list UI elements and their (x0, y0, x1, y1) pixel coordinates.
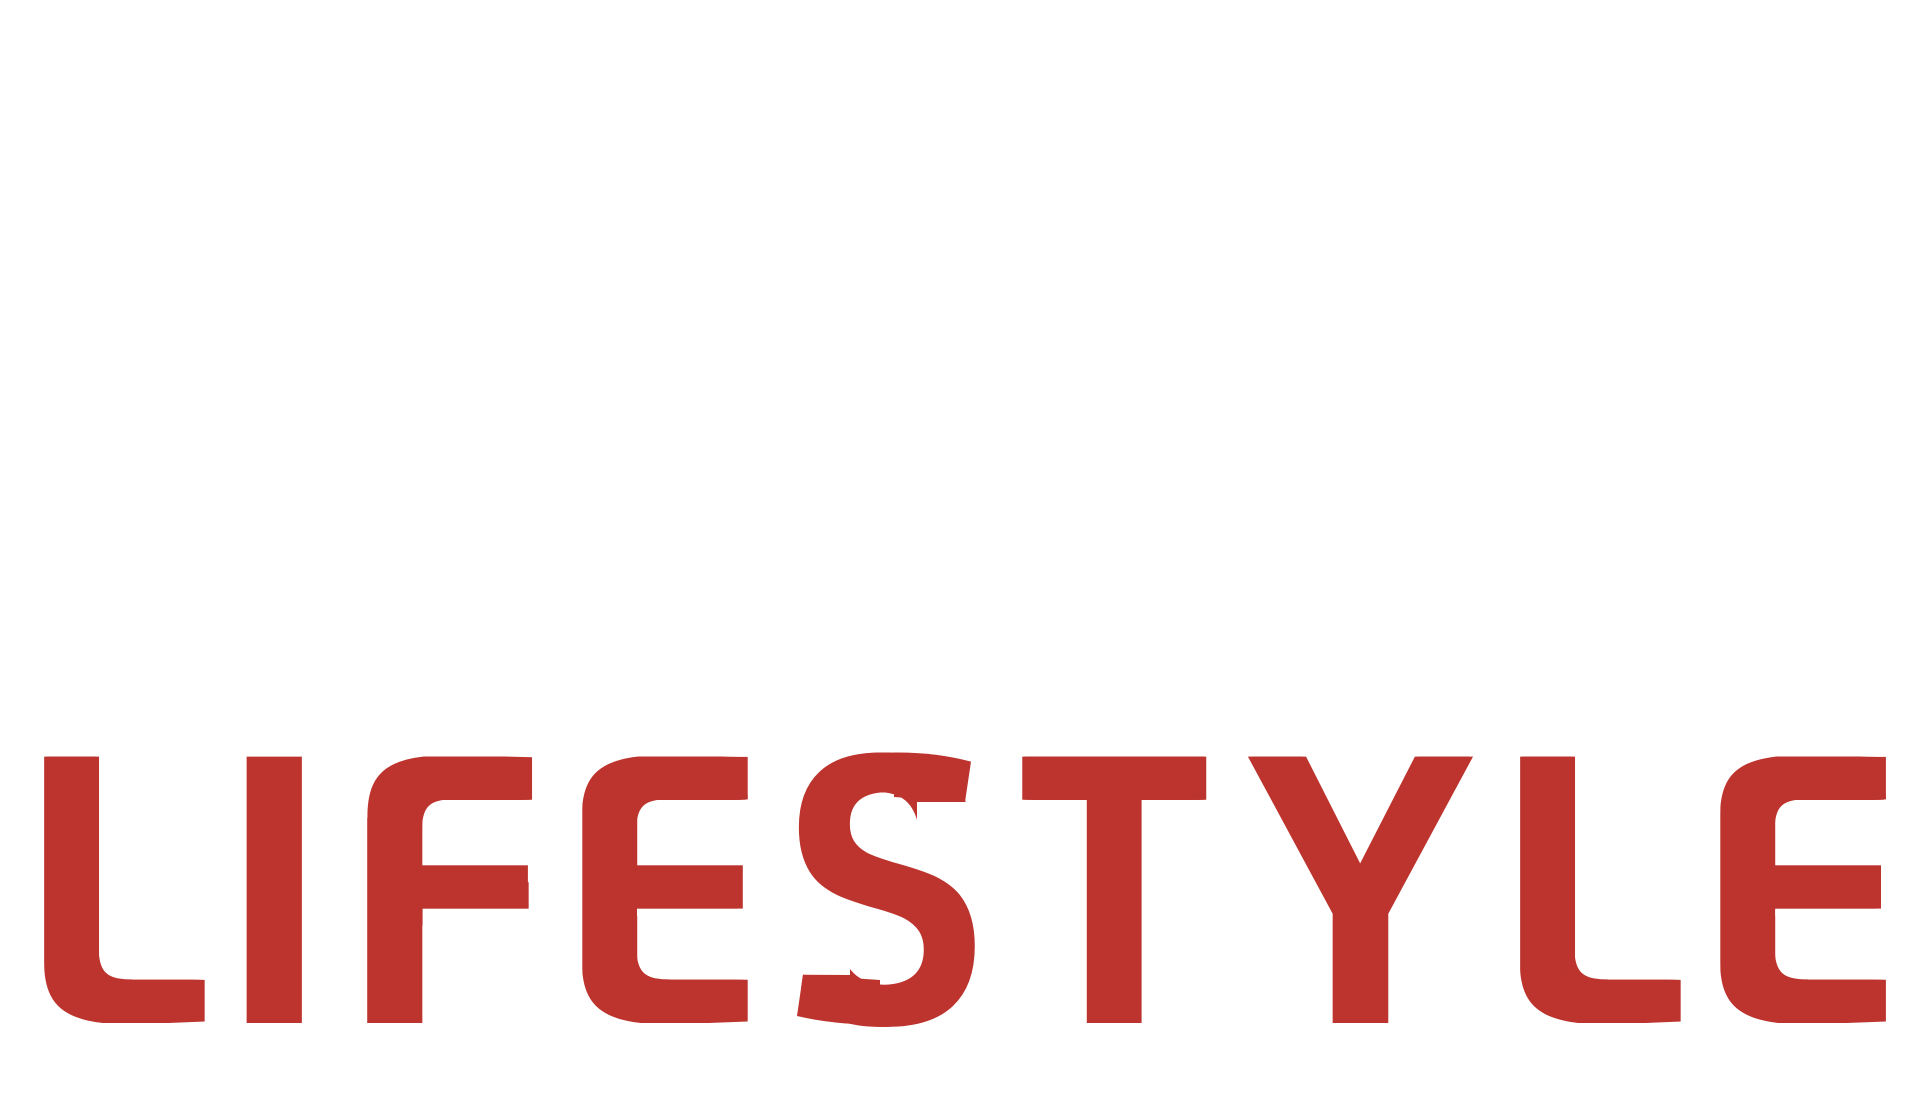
letter T: T (1019, 673, 1196, 1106)
letter L: L (25, 673, 200, 1106)
letter Y: Y (1242, 673, 1473, 1106)
letter E second: E (1702, 673, 1884, 1106)
letter S: S (781, 673, 976, 1106)
letter L second: L (1500, 673, 1675, 1106)
letter E: E (564, 673, 746, 1106)
letter F: F (347, 673, 532, 1106)
letter I: I (221, 673, 327, 1106)
wordmark: LIFESTYLE (25, 673, 1886, 1106)
